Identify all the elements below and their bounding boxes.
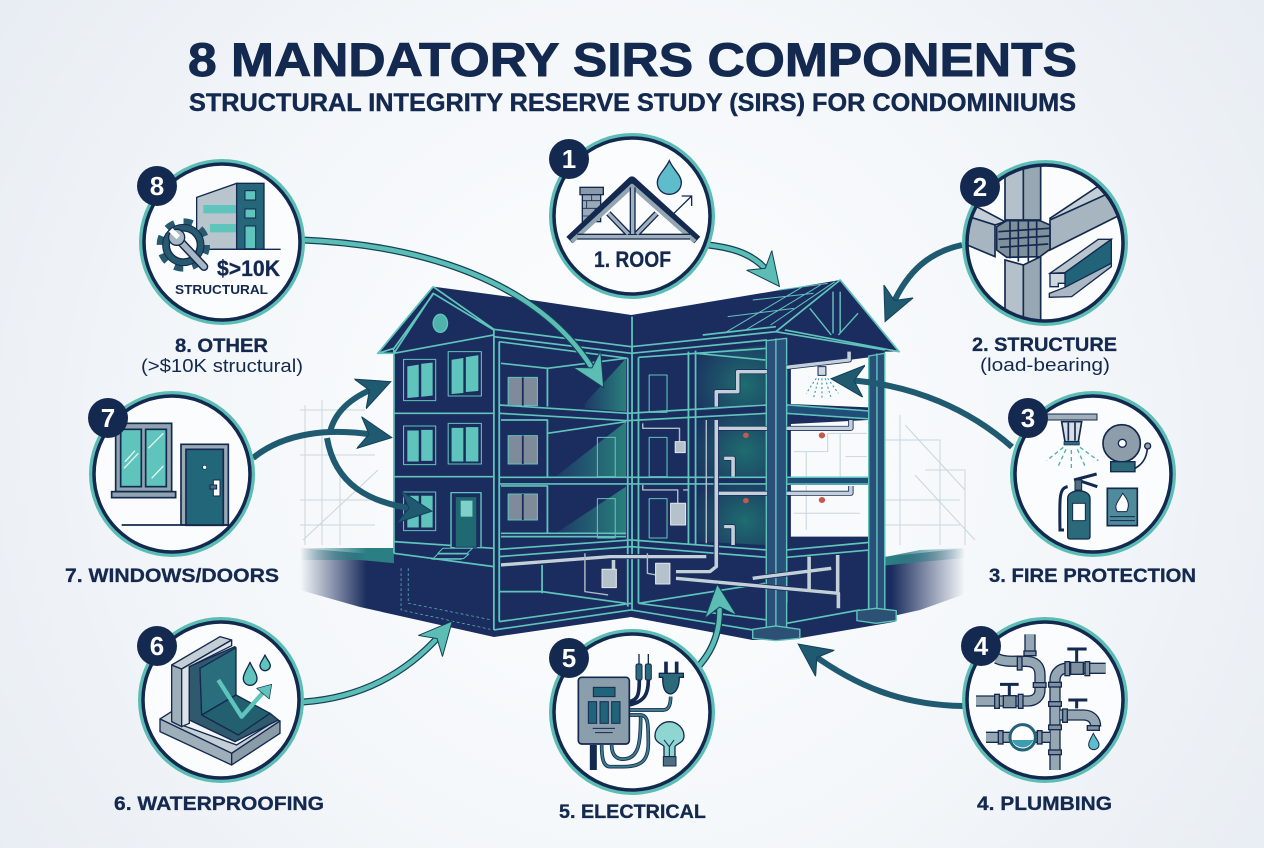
label: 5. Electrical: 5. ELECTRICAL — [559, 802, 706, 823]
badge 2: 2 — [973, 172, 987, 202]
label: 4. Plumbing: 4. PLUMBING — [977, 794, 1112, 815]
badge 3 — [1008, 398, 1048, 438]
arrow: 3 Fire Protection to building — [848, 380, 1012, 447]
panel: 4 Plumbing — [961, 619, 1126, 815]
subtitle: STRUCTURAL INTEGRITY RESERVE STUDY (SIRS) FOR CONDOMINIUMS — [189, 89, 1076, 117]
icon: concrete column, beams and steel I-beam — [968, 166, 1117, 320]
label: 2. Structure: 2. STRUCTURE — [972, 335, 1117, 356]
pale lines in open bays — [794, 433, 867, 530]
electrical panels — [602, 442, 686, 588]
arrow: 2 Structure to building — [892, 245, 962, 306]
badge 5: 5 — [562, 643, 576, 673]
sublabel: over 10K structural: (>$10K structural) — [141, 356, 303, 376]
front door and steps — [431, 493, 481, 559]
icon: waterproofing membrane section — [160, 637, 280, 765]
wireframe lines — [378, 280, 899, 630]
icon: sprinkler, bell, extinguisher and fire sign — [1045, 414, 1151, 539]
building silhouette — [378, 280, 899, 640]
arrow: 8 Other to building — [303, 240, 595, 373]
icon: building, gear and wrench — [160, 183, 281, 268]
badge 8 — [137, 166, 177, 206]
ground plane — [300, 548, 965, 640]
interior glow panels — [556, 345, 765, 545]
roof grid on right slope — [724, 282, 835, 333]
sublabel: load-bearing: (load-bearing) — [980, 355, 1110, 375]
arrows: 7 Windows and Doors to building — [253, 388, 415, 509]
icon: window and door — [112, 423, 228, 525]
interior doors — [597, 375, 667, 538]
label: 8. Other: 8. OTHER — [175, 336, 268, 357]
badge 3: 3 — [1021, 403, 1035, 433]
title: 8 MANDATORY SIRS COMPONENTS — [188, 33, 1077, 86]
badge 6: 6 — [150, 631, 164, 661]
open bays at right — [791, 357, 869, 537]
label: 1. Roof: 1. ROOF — [594, 247, 671, 272]
right gable truss — [810, 292, 858, 335]
label: 3. Fire Protection: 3. FIRE PROTECTION — [989, 566, 1196, 587]
attic round window — [433, 314, 447, 332]
arrow: 4 Plumbing to building — [812, 654, 963, 706]
badge 1: 1 — [562, 144, 576, 174]
badge 2 — [960, 167, 1000, 207]
arrow: 1 Roof to building — [708, 245, 769, 273]
panel: 8 Other — [137, 161, 303, 376]
circle ring 2 — [967, 165, 1123, 321]
panel: 1 Roof — [549, 135, 713, 297]
arrow: 6 Waterproofing to building — [303, 634, 441, 702]
exterior windows — [404, 352, 481, 531]
icon: pipes, valves, meter and faucet — [976, 634, 1106, 770]
label: 7. Windows/Doors: 7. WINDOWS/DOORS — [65, 566, 279, 587]
badge 7 — [88, 398, 128, 438]
badge 5 — [549, 638, 589, 678]
badge 1 — [549, 139, 589, 179]
label: dollar threshold: $>10K — [217, 256, 280, 281]
pipes and conduits — [501, 352, 851, 608]
interior windows — [508, 377, 537, 520]
arrow: 5 Electrical to building — [697, 601, 720, 668]
panel: 2 Structure — [960, 157, 1126, 375]
blueprint background lines — [300, 400, 975, 545]
building cutaway — [378, 280, 899, 641]
panel: 7 Windows and Doors — [65, 393, 279, 587]
label: structural: STRUCTURAL — [175, 282, 268, 297]
badge 7: 7 — [101, 403, 115, 433]
badge 8: 8 — [150, 171, 164, 201]
badge 4 — [961, 626, 1001, 666]
icon: roof truss and water drop — [569, 161, 697, 242]
right columns — [753, 338, 896, 641]
panel: 5 Electrical — [549, 631, 713, 823]
foundation dashed outline — [401, 568, 492, 629]
label: 6. Waterproofing: 6. WATERPROOFING — [114, 794, 324, 815]
dark slabs in right bays — [787, 405, 878, 484]
badge 6 — [137, 626, 177, 666]
badge 4: 4 — [974, 631, 989, 661]
icon: electrical panel, plug and bulb — [578, 654, 684, 770]
panel: 3 Fire Protection — [989, 393, 1196, 587]
panel: 6 Waterproofing — [114, 619, 324, 815]
sprinkler heads — [743, 367, 838, 503]
